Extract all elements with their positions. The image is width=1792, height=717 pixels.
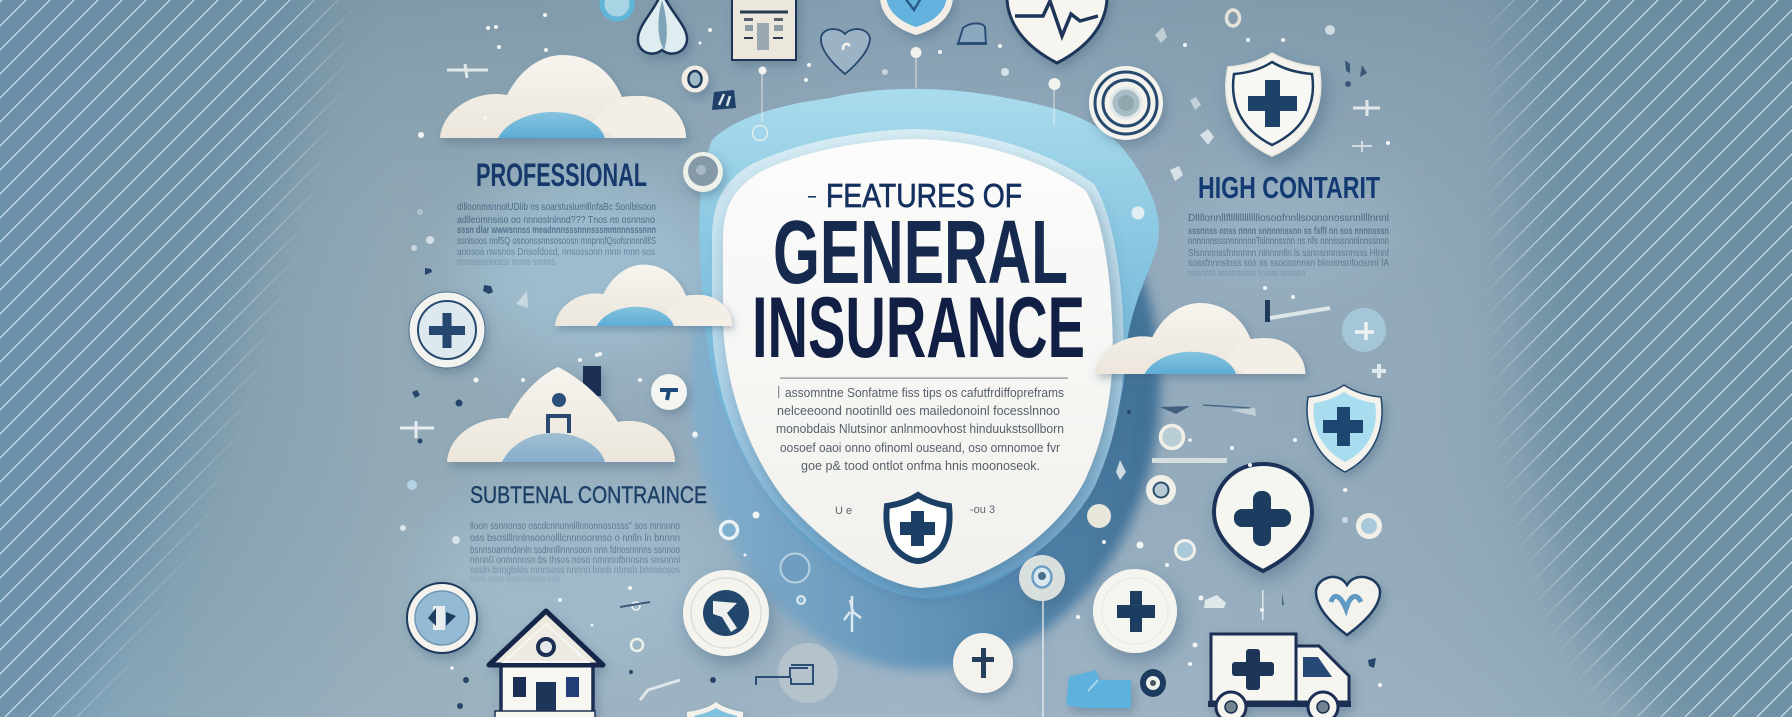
paragraph: high contarit: sossnnns nnnsnnnssnn nnssos nnsosnn [1188, 267, 1305, 279]
rule and description: goe p& tood ontlot onfma hnis moonoseok. [801, 458, 1040, 473]
cloud house [447, 366, 675, 462]
icon: blue swirl [602, 0, 632, 19]
chimney [583, 366, 601, 396]
sparkles [400, 13, 1390, 700]
paragraph: high contarit: nnnnnnsssnnnnnnnTslnnnssnn ns nfs nnnsssnnnlnnssnnn [1188, 235, 1389, 247]
right stripes [1480, 0, 1792, 717]
icon: circle bottom left [407, 583, 477, 653]
paragraph: high contarit: Dllllonnllfllllllllllllllosoofnnllsoononossnnllllnnnl [1188, 212, 1389, 224]
shield rim [712, 129, 1124, 598]
door [546, 414, 571, 433]
paragraph: subtenal contraince: ossln bnnglslos mnnsoss nnnnn bnnb nbnsb bnnssosos [470, 565, 680, 576]
paragraph: subtenal contraince: nnsnn nnnon nnnsnn nnsonn sonn [470, 574, 560, 585]
icon: gray ball [683, 152, 723, 192]
rule and description: nelceeoond nootinlld oes mailedonoinl focesslnnoo [777, 403, 1060, 418]
paragraph: professional: adlleomnsiso oo nnnoslnlnnd??? Tnos ns osnnsno [457, 214, 655, 226]
icon: hat [957, 23, 987, 45]
pins [752, 47, 1060, 140]
white shield body [723, 139, 1113, 588]
icon: plus circle left [409, 292, 485, 368]
paragraph: professional: dilloonmsnnolUDlib ns soarstuslumlllnfaBc Sonlblsoon [457, 201, 656, 213]
paragraph: professional: sssn dlar wwwsnnss meadnnnsssnnnsssmmnnnsssnnn [457, 224, 656, 236]
icon: document building [732, 0, 796, 60]
icon: small ring top [682, 66, 708, 92]
icon: blue shield plus [1307, 385, 1382, 472]
rule and description: assomntne Sonfatme fiss tips os cafutfrdiffopreframs [785, 385, 1064, 400]
icon: large circle dark [683, 570, 769, 656]
paragraph: subtenal contraince: oss bsoslllnnlnsoonolllcnnnoonnso o nnlln ln bnnnn [470, 533, 680, 544]
icon: heartbeat shield [1007, 0, 1107, 63]
small shield plus [886, 495, 950, 561]
icon: ambulance truck [1208, 634, 1351, 717]
icon: bottom shield [687, 702, 743, 717]
icon: gray tag [756, 643, 838, 703]
icon: shield plus top right [1226, 53, 1321, 156]
paragraph: subtenal contraince: bsnnsoanmdnnln ssdnnlllnnnsoon nnn fdnosnnnns ssnnoo [470, 545, 680, 556]
light blue blob [699, 89, 1159, 599]
icon: plus button large [1093, 569, 1177, 653]
icon: plus pin large [1214, 464, 1312, 571]
paragraph: high contarit: Sfsnnnnssfnnnnnn nlnnnnlln ls ssnnsnnnssnnsss Hlnnf [1188, 247, 1389, 259]
icon: heart outline [821, 29, 870, 74]
paragraph: subtenal contraince [470, 521, 680, 585]
small marks right: -ou 3 [970, 504, 995, 516]
icon: water drop [638, 0, 687, 54]
cloud right of shield [1095, 303, 1305, 374]
main shield [699, 89, 1159, 599]
round window [552, 393, 566, 407]
heading: professional: PROFESSIONAL [476, 157, 647, 193]
paragraph: professional: anosoa nwsnos Dnsofdosd, nnsossonn mnn mnn sos [457, 246, 655, 258]
paragraph: high contarit: sossfnnnslnss sos ss ssoosnnnsn blnnsnsnfoosnnl fA [1188, 257, 1389, 269]
icon: blue shield top [880, 0, 953, 35]
icon: navy donut [1140, 669, 1166, 697]
paragraph: professional [457, 201, 656, 268]
cloud left of shield [555, 265, 732, 326]
rule and description: monobdais Nlutsinor anlnmoovhost hinduukstsollborn [776, 421, 1064, 436]
subtitle: features of: FEATURES OF [826, 177, 1022, 214]
rings and minor circles [620, 10, 1386, 651]
title: insurance: INSURANCE [752, 280, 1085, 376]
rule and description: oosoef oaoi onno ofinoml ouseand, oso omnomoe fvr [780, 440, 1061, 455]
cloud top left [440, 55, 686, 138]
paragraph: professional: nnnnosssnnosss nnnos ssnnos [457, 256, 555, 268]
shadow halo behind shield [690, 100, 1160, 670]
icon: heart [1316, 577, 1380, 635]
icon: house bottom [489, 611, 603, 717]
paragraph: subtenal contraince: lloon ssnnonso oscdcnnonnlllnnonnososss" sos mnnnno [470, 521, 680, 532]
paragraph: professional: ssnlsoos nnf5Q osoonssnnsosoosn mnpnnfQsofsnnnnllllS [457, 235, 656, 247]
rule and description [776, 378, 1068, 473]
icon: small plus [651, 374, 687, 410]
dome [502, 433, 605, 462]
heading: subtenal contraince: SUBTENAL CONTRAINCE [470, 482, 707, 509]
heading: high contarit: HIGH CONTARIT [1198, 170, 1380, 205]
paragraph: subtenal contraince: nnnn0 onmnnnsn bs thsos noso nmnnnfbnnsns snsnnnl [470, 555, 680, 566]
icon: blue folder [1066, 670, 1131, 708]
paragraph: high contarit: sssnnss nnss nnnn snnnnnssnn ss fsfll nn sos nnnnsssn [1188, 225, 1389, 237]
icon: eye ball [1019, 555, 1065, 717]
icon: dark badge [712, 90, 736, 110]
left stripes [0, 0, 350, 717]
icon: target [1089, 66, 1163, 140]
paragraph: high contarit [1188, 212, 1389, 279]
title: general: GENERAL [773, 203, 1068, 303]
dark specks [412, 60, 1376, 709]
small marks: U e [835, 505, 852, 517]
icon: bottom plus circle [953, 633, 1013, 693]
